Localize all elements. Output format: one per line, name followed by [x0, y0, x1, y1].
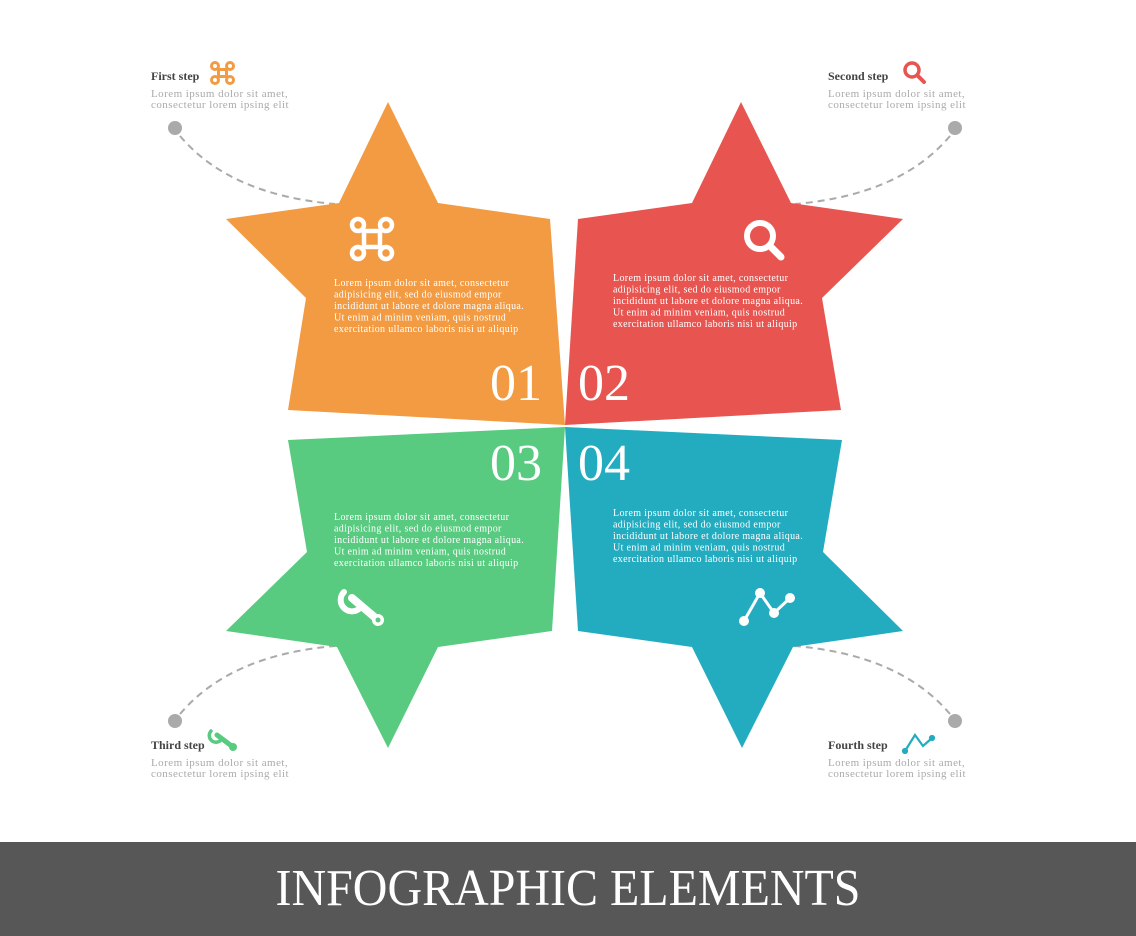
- icon: small command: [212, 62, 234, 84]
- connector: fourth step: [795, 646, 962, 728]
- text block 04: incididunt ut labore et dolore magna aliqua.: [613, 531, 803, 542]
- text block 02: Lorem ipsum dolor sit amet, consectetur: [613, 273, 789, 284]
- number 02: 02: [578, 355, 630, 412]
- footer banner: [0, 842, 1136, 936]
- label: fourth step: Lorem ipsum dolor sit amet,: [828, 757, 965, 769]
- icon: wrench: [341, 592, 384, 626]
- icon: magnifier: [747, 223, 781, 257]
- label: third step: Lorem ipsum dolor sit amet,: [151, 757, 288, 769]
- label: second step: Lorem ipsum dolor sit amet,: [828, 88, 965, 100]
- text block 01: adipisicing elit, sed do eiusmod empor: [334, 290, 502, 300]
- text block 04: Lorem ipsum dolor sit amet, consectetur: [613, 508, 789, 519]
- text block 02: exercitation ullamco laboris nisi ut aliquip: [613, 319, 798, 330]
- text block 02: incididunt ut labore et dolore magna aliqua.: [613, 296, 803, 307]
- number 03: 03: [490, 435, 542, 492]
- label: third step: Third step: [151, 738, 205, 752]
- connector: first step: [168, 121, 335, 204]
- text block 02: adipisicing elit, sed do eiusmod empor: [613, 284, 781, 296]
- icon: small line chart: [903, 735, 934, 753]
- label: third step: [151, 731, 289, 780]
- label: fourth step: consectetur lorem ipsing elit: [828, 768, 966, 780]
- panel: 01 orange star: [226, 102, 565, 425]
- icon: line chart: [740, 590, 794, 624]
- panel: 02 red star: [565, 102, 903, 425]
- text block 02: Ut enim ad minim veniam, quis nostrud: [613, 308, 785, 318]
- label: third step: consectetur lorem ipsing elit: [151, 768, 289, 780]
- label: first step: [151, 62, 289, 111]
- label: second step: consectetur lorem ipsing elit: [828, 99, 966, 111]
- text block 03: exercitation ullamco laboris nisi ut aliquip: [334, 558, 519, 569]
- label: first step: consectetur lorem ipsing elit: [151, 99, 289, 111]
- text block 04: exercitation ullamco laboris nisi ut aliquip: [613, 554, 798, 565]
- icon: small wrench: [209, 731, 237, 751]
- panel: 03 green star: [226, 427, 565, 748]
- text block 01: exercitation ullamco laboris nisi ut aliquip: [334, 324, 519, 335]
- connector: second step: [795, 121, 962, 204]
- label: first step: Lorem ipsum dolor sit amet,: [151, 88, 288, 100]
- text block 04: Ut enim ad minim veniam, quis nostrud: [613, 542, 785, 554]
- text block 03: incididunt ut labore et dolore magna aliqua.: [334, 535, 524, 546]
- icon: command: [352, 219, 392, 259]
- text block 03: Ut enim ad minim veniam, quis nostrud: [334, 546, 506, 558]
- title: INFOGRAPHIC ELEMENTS: [276, 860, 860, 917]
- label: second step: [828, 63, 966, 111]
- number 04: 04: [578, 435, 630, 492]
- text block 03: Lorem ipsum dolor sit amet, consectetur: [334, 512, 510, 523]
- icon: small magnifier: [905, 63, 924, 82]
- text block 04: adipisicing elit, sed do eiusmod empor: [613, 520, 781, 530]
- text block 01: Ut enim ad minim veniam, quis nostrud: [334, 312, 506, 324]
- panel: 04 teal star: [565, 427, 903, 748]
- connector: third step: [168, 646, 335, 728]
- number 01: 01: [490, 355, 542, 412]
- label: fourth step: [828, 735, 966, 780]
- label: first step: First step: [151, 69, 200, 83]
- label: second step: Second step: [828, 69, 889, 83]
- text block 01: incididunt ut labore et dolore magna aliqua.: [334, 301, 524, 312]
- text block 03: adipisicing elit, sed do eiusmod empor: [334, 524, 502, 534]
- label: fourth step: Fourth step: [828, 738, 888, 752]
- text block 01: Lorem ipsum dolor sit amet, consectetur: [334, 278, 510, 289]
